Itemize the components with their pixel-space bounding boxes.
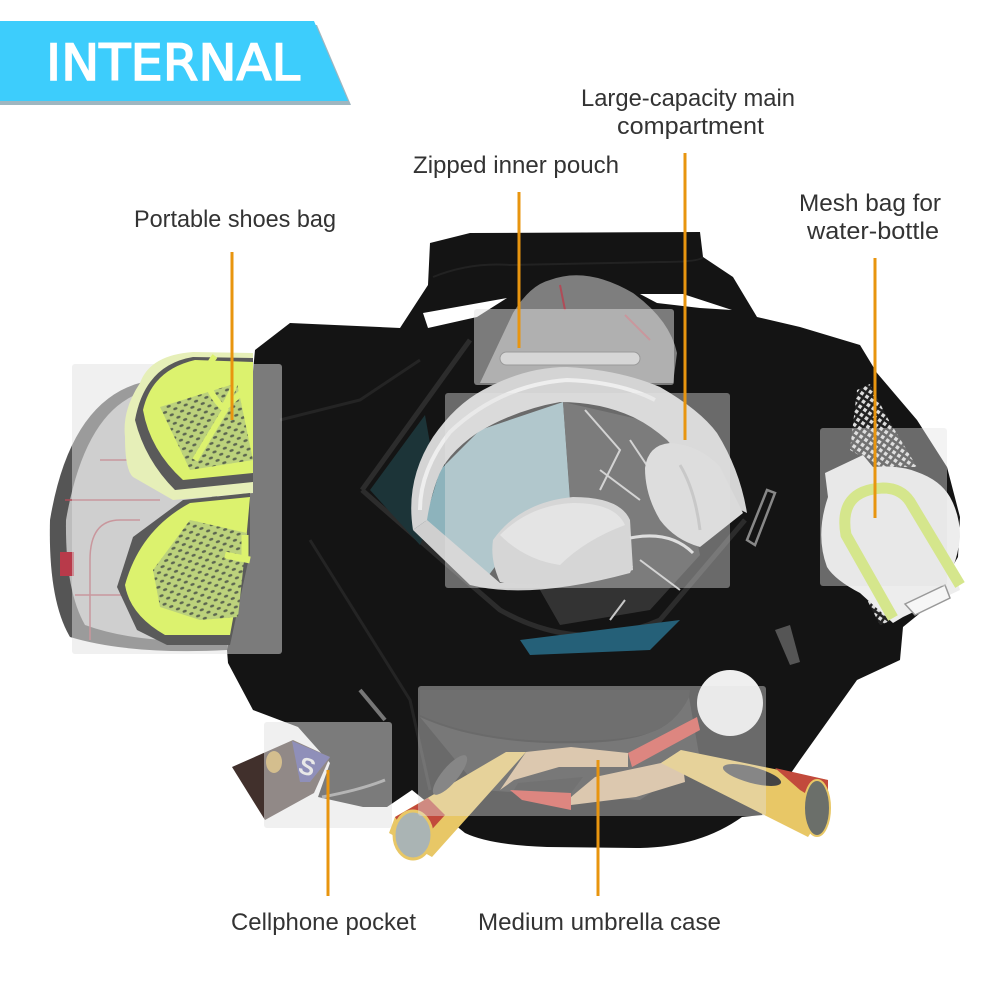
panel: bottle overlay xyxy=(820,428,947,586)
panel: shoes bag overlay xyxy=(72,364,282,654)
label: Mesh bag for water-bottle: Mesh bag for xyxy=(799,190,941,217)
panel: cellphone overlay xyxy=(264,722,392,828)
panel: pouch overlay xyxy=(474,309,674,385)
label: Portable shoes bag: Portable shoes bag xyxy=(134,206,336,233)
leader lines xyxy=(232,153,875,896)
banner: INTERNAL: INTERNAL xyxy=(46,34,300,92)
panel: umbrella case overlay xyxy=(418,686,766,816)
label: Zipped inner pouch: Zipped inner pouch xyxy=(413,152,619,179)
shoes xyxy=(117,352,253,645)
label: Mesh bag for water-bottle: water-bottle xyxy=(806,218,939,245)
banner: INTERNAL xyxy=(0,21,351,105)
label: Large-capacity main compartment xyxy=(581,85,795,140)
duffel bag body xyxy=(227,232,960,848)
panel: main compartment overlay xyxy=(445,393,730,588)
mesh bottle pocket xyxy=(820,384,960,625)
label: Large-capacity main compartment: compartment xyxy=(617,113,764,140)
label: Medium umbrella case: Medium umbrella case xyxy=(478,909,721,936)
shoes bag flap xyxy=(50,382,227,651)
bottle green band xyxy=(845,488,960,618)
label: Cellphone pocket: Cellphone pocket xyxy=(231,909,416,936)
inner pouch xyxy=(474,275,677,385)
cellphone pocket with snack xyxy=(232,722,392,828)
label: Large-capacity main compartment: Large-capacity main xyxy=(581,85,795,112)
cellphone pocket with snack: S xyxy=(295,752,319,783)
umbrella case with paddles and ball xyxy=(389,670,830,859)
pouch zipper bar xyxy=(500,352,640,365)
zipper pull xyxy=(747,490,775,545)
label: Mesh bag for water-bottle xyxy=(799,190,941,245)
main compartment contents: tablet, book and headphones xyxy=(411,367,775,655)
